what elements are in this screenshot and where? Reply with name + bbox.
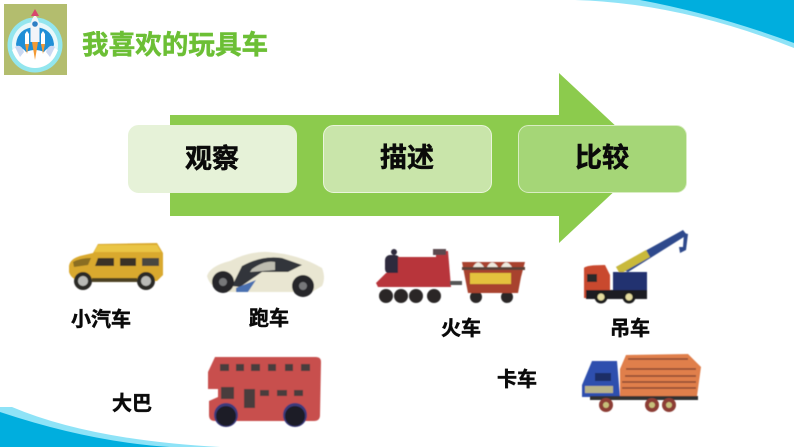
- step: 描述: [324, 126, 492, 192]
- label: 大巴: 大巴: [112, 392, 152, 415]
- step: 比较: 比较: [575, 143, 629, 173]
- label: 火车: 火车: [441, 316, 481, 340]
- toy: sports car: [207, 252, 324, 297]
- step: 描述: 描述: [380, 143, 434, 173]
- step: 比较: [518, 126, 686, 192]
- icon: rocket badge: [4, 4, 67, 75]
- process arrow: [170, 73, 650, 243]
- bottom left wave: [0, 407, 220, 447]
- label: 跑车: 跑车: [249, 306, 289, 330]
- toy: red train: [376, 249, 525, 303]
- top right wave: [575, 0, 794, 48]
- label: 吊车: 吊车: [610, 316, 650, 340]
- toy: crane truck: [584, 230, 688, 304]
- toy: cargo truck: [582, 354, 701, 412]
- step: 观察: [128, 126, 296, 192]
- label: 小汽车: 小汽车: [71, 307, 131, 331]
- toy: yellow car: [69, 243, 163, 290]
- title: 我喜欢的玩具车: [82, 30, 268, 60]
- label: 卡车: 卡车: [497, 367, 537, 391]
- toy: double decker bus: [208, 357, 321, 427]
- step: 观察: 观察: [185, 144, 239, 174]
